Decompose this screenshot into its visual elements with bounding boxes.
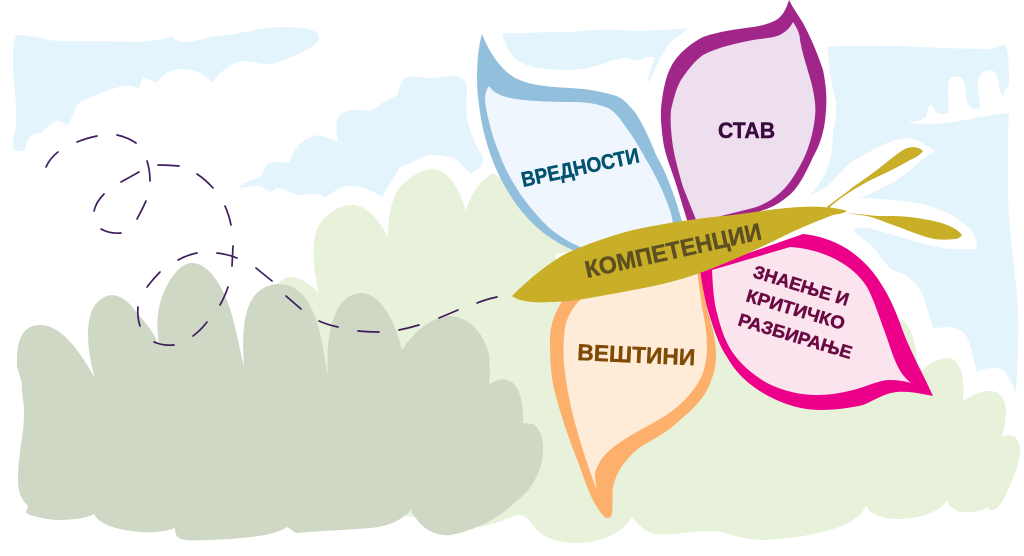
label: attitude: СТАВ (718, 118, 775, 143)
label: values: ВРЕДНОСТИ (519, 144, 641, 192)
cloud: right (809, 45, 1018, 392)
label: knowledge and critical understanding: КРИТИЧКО (744, 286, 847, 334)
label: competences: КОМПЕТЕНЦИИ (582, 219, 764, 284)
label: knowledge and critical understanding (736, 262, 855, 363)
panel: values petal (477, 34, 683, 253)
flight path: dashed line (46, 135, 497, 345)
bush: grey green foreground (17, 263, 543, 540)
label: skills: ВЕШТИНИ (577, 339, 696, 370)
background clouds (13, 27, 1018, 392)
panel: attitude petal (661, 0, 826, 225)
butterfly body: competences (512, 147, 962, 302)
label: knowledge and critical understanding: РАЗБИРАЊЕ (736, 310, 855, 363)
panel: skills petal (550, 270, 716, 518)
cloud: top centre (502, 28, 688, 83)
bush: pale green background (270, 169, 1020, 543)
white gap beneath the values petal (556, 248, 590, 268)
cloud: top left (13, 27, 319, 151)
cloud: middle (238, 76, 483, 198)
antenna: upper (827, 147, 923, 208)
antenna: lower (847, 213, 962, 240)
label: knowledge and critical understanding: ЗНАЕЊЕ И (751, 262, 851, 310)
panel: knowledge petal (700, 234, 933, 410)
